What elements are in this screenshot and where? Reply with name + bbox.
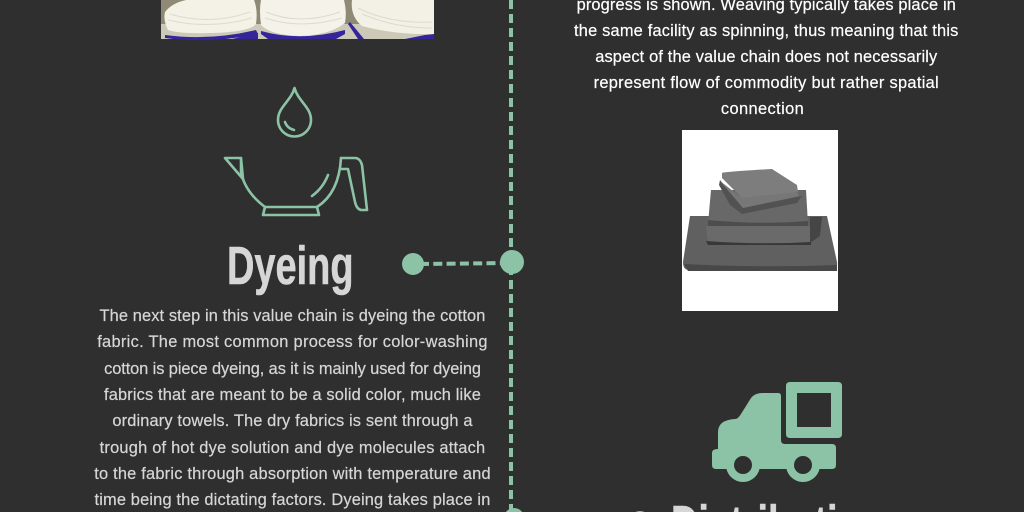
- text block: dyeing description: fabric. The most common process for color-washing: [97, 333, 488, 351]
- text block: weaving description: represent flow of commodity but rather spatial: [594, 74, 939, 92]
- text block: dyeing description: The next step in this value chain is dyeing the cotton: [100, 307, 485, 325]
- text block: dyeing description: trough of hot dye solution and dye molecules attach: [100, 439, 485, 457]
- text block: dyeing description: time being the dictating factors. Dyeing takes place in: [94, 491, 491, 509]
- text block: weaving description: connection: [721, 100, 804, 118]
- text block: dyeing description: ordinary towels. The dry fabrics is sent through a: [112, 412, 473, 430]
- text block: dyeing description: [94, 307, 491, 509]
- heading: Dyeing: Dyeing: [227, 236, 354, 296]
- text block: weaving description: aspect of the value chain does not necessarily: [595, 48, 937, 66]
- text block: dyeing description: to the fabric through absorption with temperature and: [94, 465, 491, 483]
- text block: weaving description: [574, 0, 959, 118]
- text block: dyeing description: fabrics that are meant to be a solid color, much like: [104, 386, 481, 404]
- text block: weaving description: the same facility as spinning, thus meaning that this: [574, 22, 959, 40]
- text block: dyeing description: cotton is piece dyeing, as it is mainly used for dyeing: [104, 360, 481, 378]
